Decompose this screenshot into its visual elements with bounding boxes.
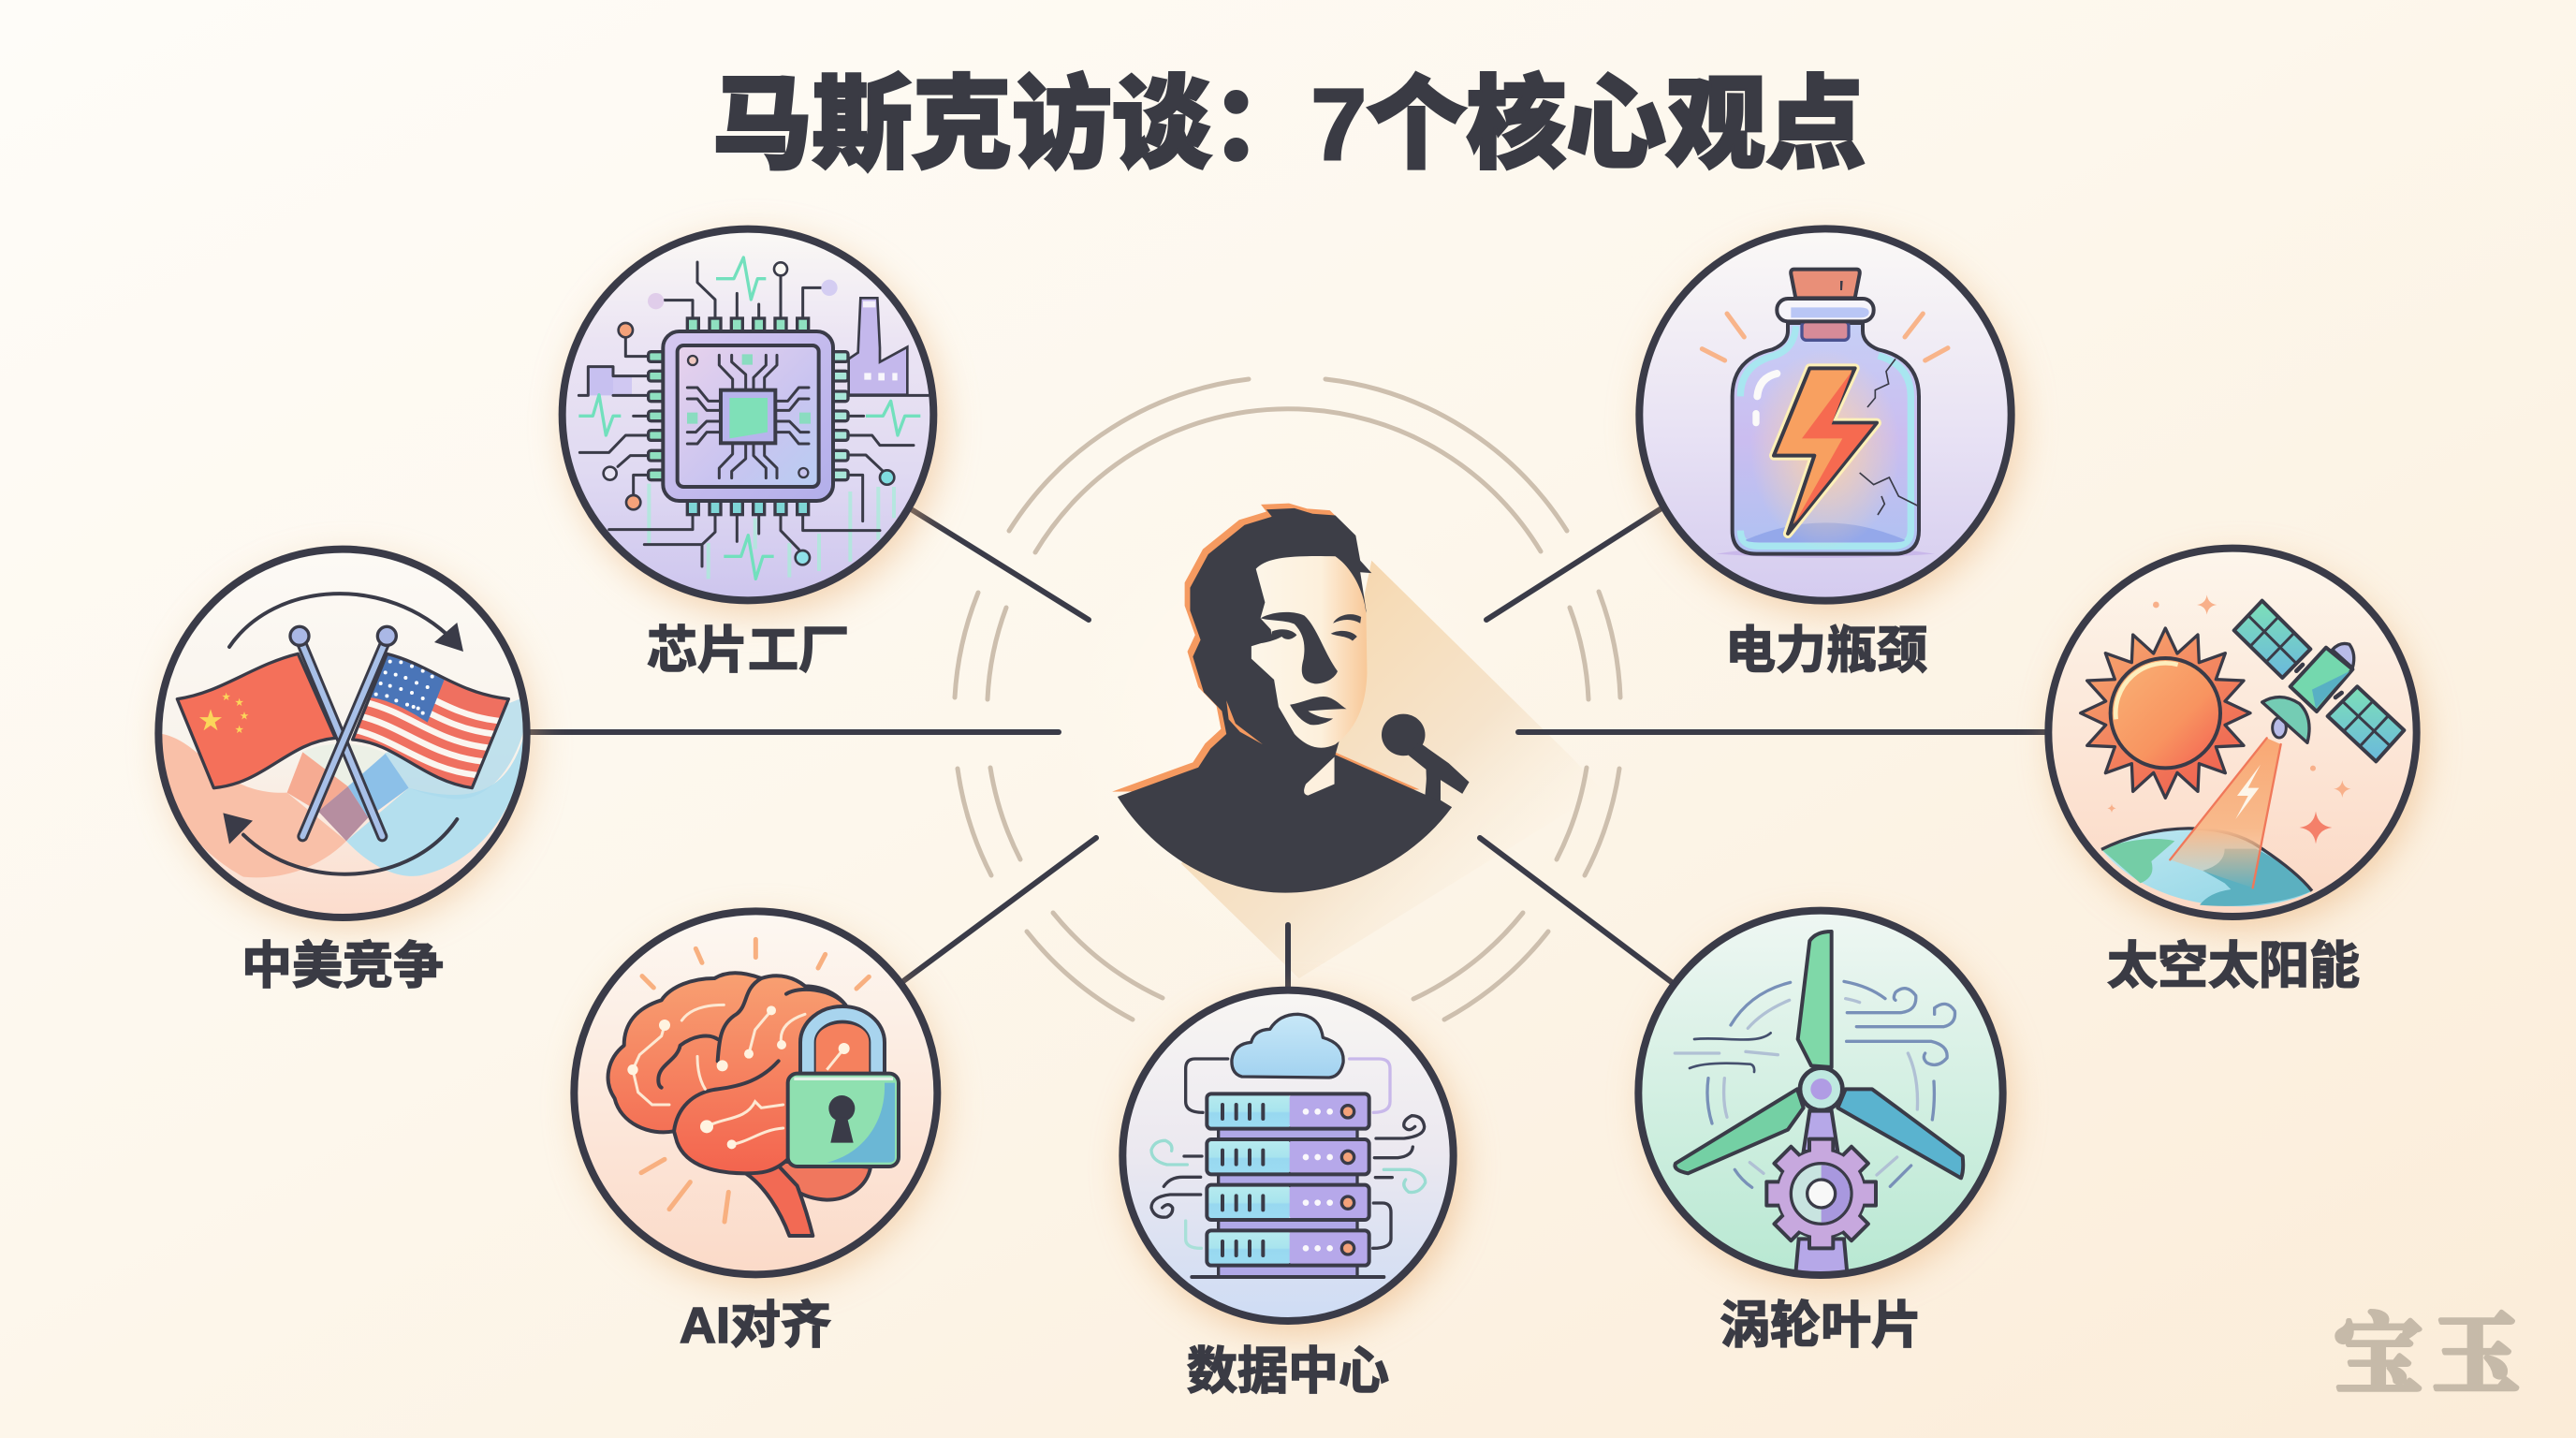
icon: server rack with cloud (1122, 990, 1454, 1321)
label: data center: 数据中心 (1187, 1343, 1389, 1400)
central portrait silhouette with microphone (1112, 504, 1470, 893)
concentric sound-wave arcs (955, 379, 1620, 1020)
panel: US-China competition (158, 550, 533, 994)
label: AI alignment: AI对齐 (680, 1298, 831, 1354)
label: US-China competition: 中美竞争 (242, 938, 444, 994)
icon: brain with padlock (574, 911, 937, 1274)
label: space solar: 太空太阳能 (2107, 938, 2360, 994)
panel: data center (1122, 990, 1461, 1400)
long shadow behind portrait (1181, 561, 1603, 978)
panel: space solar (2048, 549, 2422, 994)
panel: chip factory (563, 229, 942, 679)
connector lines (529, 508, 2047, 988)
icon: crossed Chinese and US flags (158, 550, 527, 917)
label: turbine blades: 涡轮叶片 (1720, 1298, 1922, 1354)
icon: wind turbine with gear (1638, 911, 2003, 1275)
panel: turbine blades (1638, 911, 2009, 1354)
watermark: 宝玉 (2334, 1284, 2520, 1411)
icon: bottle with lightning bolt (1639, 228, 2012, 601)
panel: AI alignment (574, 911, 944, 1354)
title: 马斯克访谈：7个核心观点 (712, 67, 1866, 181)
icon: sun, satellite and Earth (2048, 549, 2417, 917)
label: chip factory: 芯片工厂 (647, 623, 849, 679)
panel: power bottleneck (1639, 228, 2019, 679)
icon: microchip with circuit traces and factory (563, 229, 933, 600)
label: power bottleneck: 电力瓶颈 (1725, 623, 1927, 679)
server units (1207, 1093, 1369, 1266)
